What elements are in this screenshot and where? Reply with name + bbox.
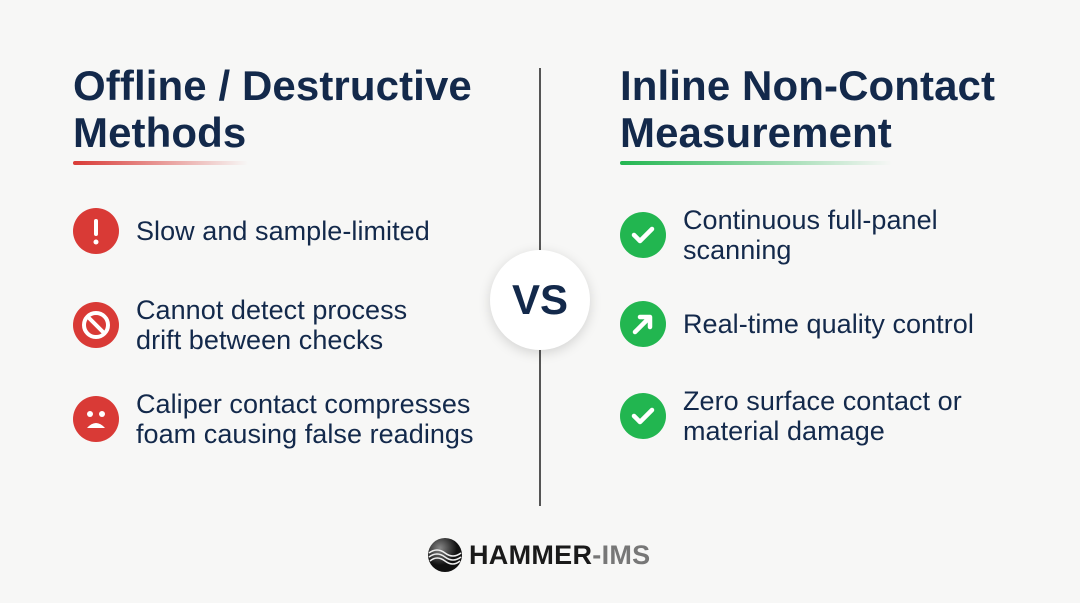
title: offline: Offline / Destructive xyxy=(73,62,472,109)
underline green xyxy=(620,161,892,165)
underline red xyxy=(73,161,248,165)
item: drift: drift between checks xyxy=(136,325,383,355)
VS badge: VS xyxy=(512,276,568,323)
item: continuous: scanning xyxy=(683,235,791,265)
icon: check xyxy=(620,393,666,439)
title: inline xyxy=(620,62,995,156)
item: caliper: Caliper contact compresses xyxy=(136,389,470,419)
icon: check xyxy=(620,212,666,258)
icon: globe xyxy=(428,538,462,572)
item: caliper xyxy=(73,389,474,449)
item: slow: Slow and sample-limited xyxy=(136,216,430,246)
divider line xyxy=(539,68,541,506)
item: caliper: foam causing false readings xyxy=(136,419,474,449)
icon: prohibited xyxy=(73,302,119,348)
item: zero contact: material damage xyxy=(683,416,885,446)
VS badge xyxy=(490,250,590,350)
title: offline xyxy=(73,62,472,156)
item: realtime: Real-time quality control xyxy=(683,309,974,339)
item: continuous: Continuous full-panel xyxy=(683,205,938,235)
icon: arrow xyxy=(620,301,666,347)
item: drift: Cannot detect process xyxy=(136,295,407,325)
icon: exclamation xyxy=(73,208,119,254)
logo: HAMMER-IMS xyxy=(469,540,650,570)
title: inline: Inline Non-Contact xyxy=(620,62,995,109)
title: inline: Measurement xyxy=(620,109,892,156)
item: realtime xyxy=(620,301,974,347)
item: zero contact xyxy=(620,386,962,446)
item: slow xyxy=(73,208,430,254)
icon: sad face xyxy=(73,396,119,442)
title: offline: Methods xyxy=(73,109,246,156)
item: zero contact: Zero surface contact or xyxy=(683,386,962,416)
item: continuous xyxy=(620,205,938,265)
item: drift xyxy=(73,295,407,355)
